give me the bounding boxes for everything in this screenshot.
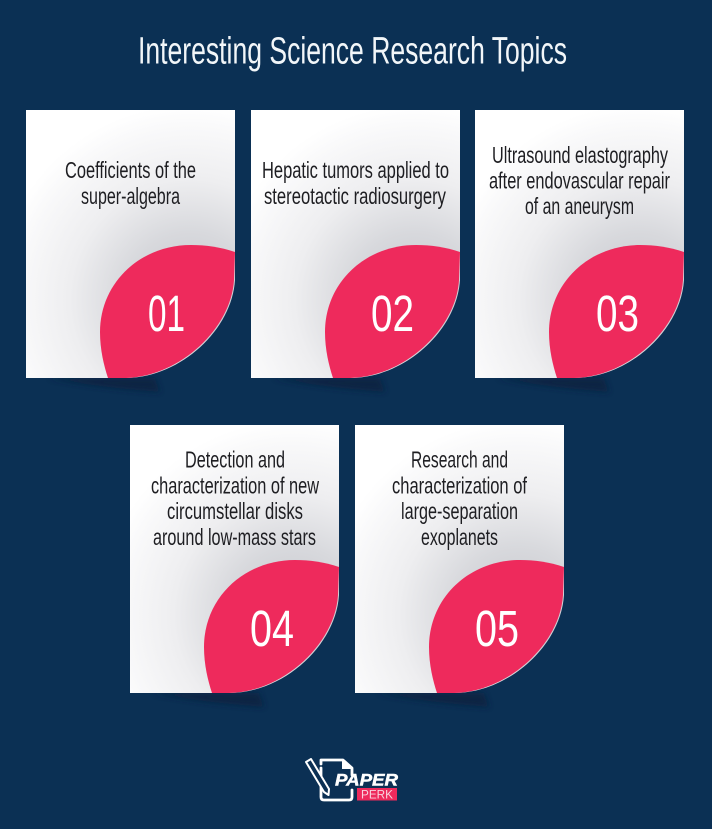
logo badge PERK: PERK [361,790,393,802]
text 02 [262,157,449,209]
number 01: 01 [148,285,185,342]
shadow 03 [497,378,609,392]
shadow 04 [152,693,264,707]
text 01: Coefficients of the [65,157,196,183]
logo word PAPER: PAPER [335,770,399,790]
text 04: circumstellar disks [167,498,303,524]
card 03 [475,110,684,392]
text 05: large-separation [401,498,518,524]
text 01: super-algebra [81,183,181,209]
number 03: 03 [596,285,639,342]
paper 03 [475,110,684,378]
card 04 [130,425,339,707]
shadow 02 [273,378,385,392]
pink leaf 04 [204,560,339,693]
paper 02 [251,110,460,378]
pink leaf 05 [429,560,564,693]
pink leaf 02 [325,245,460,378]
text 02: Hepatic tumors applied to [262,157,449,183]
icon: pencil [306,759,329,795]
card 01 [26,110,235,392]
icon: document [321,760,352,800]
pink leaf 01 [100,245,235,378]
text 04 [151,446,320,550]
number 05: 05 [475,600,519,657]
text 04: around low-mass stars [153,524,316,550]
text 03: of an aneurysm [525,193,634,219]
text 05 [392,446,527,550]
card 02 [251,110,460,392]
number 02: 02 [371,285,414,342]
paper 01 [26,110,235,378]
text 04: characterization of new [151,472,320,498]
text 04: Detection and [185,446,285,472]
text 05: Research and [411,446,508,472]
pink leaf 03 [549,245,684,378]
text 02: stereotactic radiosurgery [264,183,446,209]
paper 05 [355,425,564,693]
text 05: characterization of [392,472,527,498]
number 04: 04 [250,600,294,657]
shadow 05 [377,693,489,707]
text 01 [65,157,196,209]
shadow 01 [48,378,160,392]
card 05 [355,425,564,707]
paper 04 [130,425,339,693]
text 03 [489,142,670,219]
text 05: exoplanets [421,524,498,550]
logo [306,759,399,802]
